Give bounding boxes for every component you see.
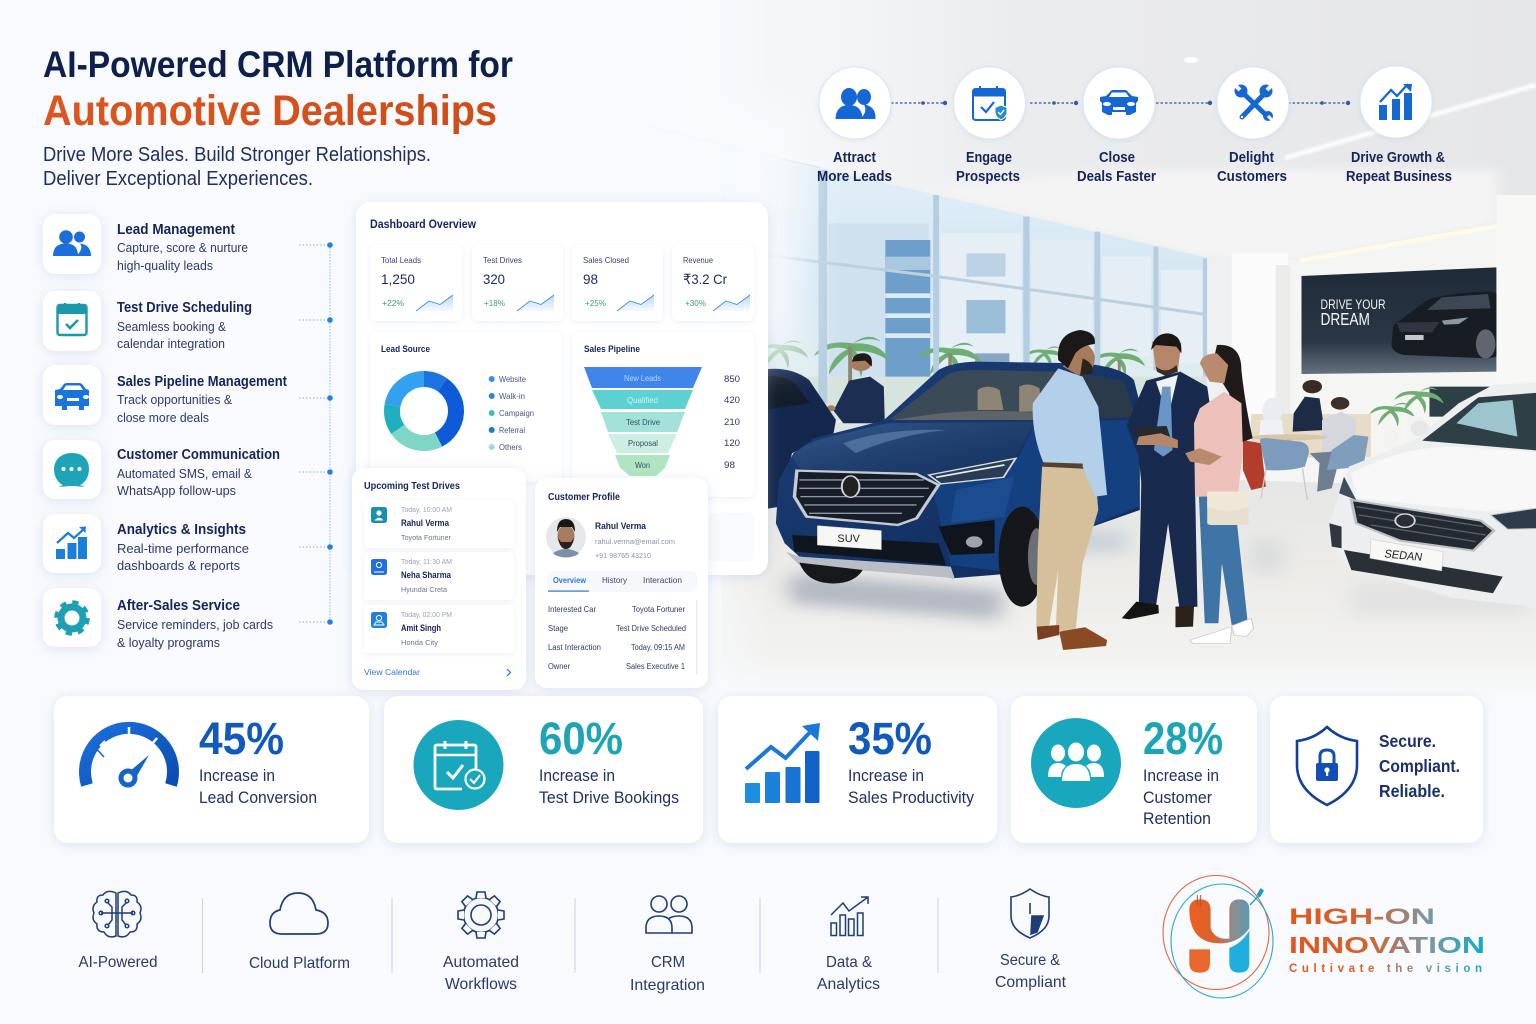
icon: chat bubble xyxy=(54,453,89,487)
feature: after-sales service: After-Sales Service xyxy=(117,598,240,614)
right pillar xyxy=(1496,195,1536,395)
step: engage prospects xyxy=(954,67,1026,185)
donut legend: Referral xyxy=(499,426,525,435)
lit ceiling area xyxy=(917,170,1498,261)
step: drive growth and repeat business: Drive Growth & xyxy=(1351,150,1445,166)
row: Neha Sharma: Neha Sharma xyxy=(401,570,451,580)
avatar portrait xyxy=(546,517,586,558)
stat card: customer retention: Customer xyxy=(1143,789,1212,807)
step: close deals faster: Close xyxy=(1099,150,1135,166)
capability: CRM integration: CRM xyxy=(651,954,685,971)
stat card: sales productivity: Increase in xyxy=(848,767,924,785)
feature: test drive scheduling: Test Drive Scheduling xyxy=(117,300,252,316)
blue SUV xyxy=(776,362,1140,607)
icon: gauge xyxy=(85,727,173,785)
feature: analytics and insights: Real-time performance xyxy=(117,542,249,556)
funnel chart: New Leads xyxy=(624,374,661,383)
icon: outline shield xyxy=(1011,889,1049,938)
panel: customer profile: +91 98765 43210 xyxy=(595,551,651,560)
stat card: secure compliant reliable: Compliant. xyxy=(1379,756,1460,776)
icon: outline people xyxy=(646,896,692,933)
tabs: History xyxy=(602,575,628,585)
icon: team circle xyxy=(1031,718,1121,808)
donut legend: Website xyxy=(499,375,527,384)
profile details: Today, 09:15 AM xyxy=(631,643,685,652)
capability: cloud platform: Cloud Platform xyxy=(249,955,350,972)
wall poster: DREAM xyxy=(1321,309,1370,329)
poster car xyxy=(1391,292,1496,358)
step: delight customers xyxy=(1217,67,1289,185)
feature: customer communication: Customer Communication xyxy=(117,447,280,463)
profile details: Last Interaction xyxy=(548,643,601,652)
icon: gear xyxy=(56,602,88,634)
stat card: secure compliant reliable: Secure. xyxy=(1379,731,1436,751)
KPI: revenue: +30% xyxy=(685,298,706,308)
stat card: sales productivity: 35% xyxy=(848,713,932,764)
stat card: test drive bookings: Increase in xyxy=(539,767,615,785)
icon: brain xyxy=(93,891,141,937)
KPI: total leads: Total Leads xyxy=(381,255,421,265)
funnel values: 420 xyxy=(724,395,740,406)
capability: automated workflows xyxy=(443,892,519,993)
icon: bar chart xyxy=(56,526,87,559)
floor reflections xyxy=(790,530,1527,620)
feature: sales pipeline management xyxy=(43,365,287,425)
wall poster: DRIVE YOUR xyxy=(1321,296,1386,312)
KPI: sales closed: +25% xyxy=(585,298,606,308)
sedan plate: SEDAN xyxy=(1383,548,1424,564)
logo: High-On Innovation: INNOVATION xyxy=(1289,932,1485,958)
step: close deals faster xyxy=(1077,67,1156,185)
stat card: customer retention: Retention xyxy=(1143,810,1211,828)
row: Amit Singh xyxy=(364,605,514,653)
stat card: customer retention: 28% xyxy=(1143,713,1223,764)
KPI: test drives xyxy=(472,245,563,321)
showroom interior and vehicles xyxy=(721,145,1536,700)
icon: calendar circle xyxy=(414,720,504,810)
capability: secure and compliant: Secure & xyxy=(1000,952,1060,969)
funnel values: 850 xyxy=(724,374,740,385)
icon: chevron xyxy=(507,669,510,676)
row: Neha Sharma xyxy=(364,552,514,600)
faint lower card xyxy=(709,513,754,561)
profile details xyxy=(548,605,686,671)
capability: secure and compliant: Compliant xyxy=(995,974,1067,991)
feature: lead management: Capture, score & nurture xyxy=(117,241,248,255)
sedan plate xyxy=(1370,539,1443,571)
funnel values: 120 xyxy=(724,438,740,449)
funnel chart xyxy=(584,367,702,476)
stat card: secure compliant reliable: Reliable. xyxy=(1379,781,1445,801)
feature: customer communication xyxy=(43,440,280,499)
stat card: customer retention: Increase in xyxy=(1143,767,1219,785)
stat card: test drive bookings xyxy=(384,696,703,843)
capability: CRM integration xyxy=(630,896,705,994)
KPI: revenue xyxy=(672,245,754,321)
title: AI-Powered CRM Platform for xyxy=(43,43,513,85)
feature: after-sales service: & loyalty programs xyxy=(117,636,220,650)
icon: cloud xyxy=(270,893,328,934)
upper left haze of photo xyxy=(700,110,800,350)
icon: growth chart xyxy=(1379,84,1412,120)
stat card: test drive bookings: 60% xyxy=(539,713,623,764)
icon: crossed wrenches xyxy=(1234,84,1273,121)
KPI: sales closed xyxy=(572,245,663,321)
capability: automated workflows: Automated xyxy=(443,954,519,971)
icon: outline gear xyxy=(458,892,504,938)
lead source chart card: Lead Source xyxy=(381,344,430,355)
subtitle: Drive More Sales. Build Stronger Relationships. xyxy=(43,143,431,166)
stat card: lead conversion xyxy=(54,696,369,843)
KPI: total leads: +22% xyxy=(382,298,404,308)
profile details: Toyota Fortuner xyxy=(632,605,685,614)
profile details: Interested Car xyxy=(548,605,596,614)
feature: lead management: high-quality leads xyxy=(117,259,213,273)
KPI: test drives: +18% xyxy=(484,298,505,308)
row: Amit Singh: Today, 02:00 PM xyxy=(401,610,452,619)
stat card: customer retention xyxy=(1011,696,1257,843)
left edge fade of photo xyxy=(600,0,770,700)
capability: data and analytics: Analytics xyxy=(817,976,880,993)
feature: analytics and insights: Analytics & Insights xyxy=(117,522,246,538)
profile details: Owner xyxy=(548,662,570,671)
capability: AI-powered: AI-Powered xyxy=(78,954,158,971)
feature: analytics and insights: dashboards & reports xyxy=(117,559,240,573)
sales pipeline card: Sales Pipeline xyxy=(584,344,640,355)
stat card: lead conversion: 45% xyxy=(199,713,284,764)
feature: customer communication: WhatsApp follow-ups xyxy=(117,484,236,498)
tabs: Interaction xyxy=(643,575,682,585)
icon: people xyxy=(836,88,876,119)
step: drive growth and repeat business xyxy=(1346,66,1452,185)
panel: upcoming test drives: View Calendar xyxy=(364,667,420,677)
tabs xyxy=(547,571,697,592)
step: attract more leads xyxy=(817,67,892,185)
panel: dashboard overview xyxy=(356,202,768,575)
KPI: total leads: 1,250 xyxy=(381,271,415,287)
KPI: sales closed: Sales Closed xyxy=(583,255,629,265)
row: Rahul Verma: Today, 10:00 AM xyxy=(401,505,452,514)
row: Amit Singh: Honda City xyxy=(401,638,438,647)
subtitle: Deliver Exceptional Experiences. xyxy=(43,167,313,190)
step: delight customers: Delight xyxy=(1229,150,1274,166)
capability: automated workflows: Workflows xyxy=(445,976,517,993)
logo: High-On Innovation: Cultivate the vision xyxy=(1289,963,1482,975)
back wall xyxy=(1207,226,1498,507)
KPI: revenue: ₹3.2 Cr xyxy=(683,271,727,287)
SUV plate xyxy=(817,526,881,550)
donut chart xyxy=(392,379,456,443)
feature: sales pipeline management: close more deals xyxy=(117,411,209,425)
bottom row dividers xyxy=(202,898,938,973)
donut legend: Walk-in xyxy=(499,392,525,401)
subtitle xyxy=(43,143,431,190)
feature: after-sales service: Service reminders, job cards xyxy=(117,618,273,632)
title xyxy=(43,43,513,135)
capability: AI-powered xyxy=(78,891,158,971)
icon: shield with lock xyxy=(1297,727,1357,805)
step: drive growth and repeat business: Repeat Business xyxy=(1346,169,1452,185)
customer in pink top xyxy=(1185,345,1254,643)
funnel values xyxy=(724,374,740,471)
lounge with customers xyxy=(1243,380,1496,500)
profile details: Test Drive Scheduled xyxy=(616,624,686,633)
step: close deals faster: Deals Faster xyxy=(1077,169,1156,185)
step: attract more leads: Attract xyxy=(833,150,876,166)
icon: growth bars xyxy=(745,723,820,803)
step: engage prospects: Engage xyxy=(966,150,1012,166)
bottom fade of photo xyxy=(600,655,1536,700)
logo mark xyxy=(1163,876,1273,998)
funnel values: 210 xyxy=(724,417,740,428)
funnel values: 98 xyxy=(724,460,735,471)
panel: upcoming test drives xyxy=(352,468,526,690)
panel: customer profile: Rahul Verma xyxy=(595,521,647,531)
background salesperson xyxy=(827,353,885,423)
KPI: total leads xyxy=(370,245,462,321)
panel: dashboard overview: Dashboard Overview xyxy=(370,219,476,231)
showroom floor xyxy=(721,420,1536,700)
wall poster xyxy=(1301,267,1496,374)
feature: analytics and insights xyxy=(43,514,249,573)
funnel chart: Won xyxy=(635,461,650,470)
KPI: revenue: Revenue xyxy=(683,255,713,265)
stat card: lead conversion: Lead Conversion xyxy=(199,789,317,807)
capability: cloud platform xyxy=(249,893,350,972)
customer in blue shirt xyxy=(1033,330,1107,650)
white sedan xyxy=(1329,382,1536,608)
feature: lead management xyxy=(43,214,248,274)
icon: people xyxy=(53,230,91,256)
feature: test drive scheduling xyxy=(43,291,252,351)
KPI: sales closed: 98 xyxy=(583,271,598,287)
feature: test drive scheduling: Seamless booking & xyxy=(117,320,227,334)
sedan grille xyxy=(1351,500,1494,551)
row: Neha Sharma: Hyundai Creta xyxy=(401,585,448,594)
step: attract more leads: More Leads xyxy=(817,169,892,185)
feature: customer communication: Automated SMS, email & xyxy=(117,467,253,481)
stat card: sales productivity: Sales Productivity xyxy=(848,789,975,807)
row: Neha Sharma: Today, 11:30 AM xyxy=(401,557,452,566)
ceiling xyxy=(600,0,1536,320)
KPI: test drives: 320 xyxy=(483,271,505,287)
profile details: Sales Executive 1 xyxy=(626,662,685,671)
feature: sales pipeline management: Track opportunities & xyxy=(117,393,233,407)
icon: outline chart xyxy=(831,897,868,936)
capability: secure and compliant xyxy=(995,889,1067,991)
row: Amit Singh: Amit Singh xyxy=(401,623,441,633)
step: engage prospects: Prospects xyxy=(956,169,1020,185)
capability: data and analytics: Data & xyxy=(826,954,872,971)
SUV grille xyxy=(794,471,939,525)
sales pipeline card xyxy=(572,332,754,497)
glass wall with city view xyxy=(721,145,1210,430)
donut legend xyxy=(489,375,534,452)
stat card: lead conversion: Increase in xyxy=(199,767,275,785)
panel: upcoming test drives: Upcoming Test Drives xyxy=(364,481,460,492)
funnel chart: Qualified xyxy=(627,396,658,405)
row: Rahul Verma xyxy=(364,500,514,548)
showroom photo scene xyxy=(600,0,1536,700)
capability: CRM integration: Integration xyxy=(630,977,705,994)
feature: after-sales service xyxy=(43,588,273,650)
lead source chart card xyxy=(370,332,562,482)
donut legend: Campaign xyxy=(499,409,534,418)
feature: lead management: Lead Management xyxy=(117,222,235,238)
row: Rahul Verma: Rahul Verma xyxy=(401,518,449,528)
stat card: secure compliant reliable xyxy=(1270,696,1483,843)
capability: data and analytics xyxy=(817,897,880,993)
feature: sales pipeline management: Sales Pipeline Management xyxy=(117,374,287,390)
tabs: Overview xyxy=(553,575,586,585)
funnel chart: Test Drive xyxy=(626,418,661,427)
KPI: test drives: Test Drives xyxy=(483,255,522,265)
panel: customer profile xyxy=(535,478,708,688)
SUV plate: SUV xyxy=(837,532,860,545)
stat card: sales productivity xyxy=(718,696,997,843)
donut legend: Others xyxy=(499,443,522,452)
icon: calendar with check xyxy=(973,86,1007,120)
sales consultant in navy suit xyxy=(1122,333,1210,627)
row: Rahul Verma: Toyota Fortuner xyxy=(401,533,451,542)
icon: car xyxy=(55,383,89,410)
panel: customer profile: Customer Profile xyxy=(548,492,620,503)
feature: test drive scheduling: calendar integration xyxy=(117,337,225,351)
icon: car xyxy=(1100,90,1138,115)
journey steps connectors xyxy=(891,101,1350,105)
stat card: test drive bookings: Test Drive Bookings xyxy=(539,789,679,807)
title: Automotive Dealerships xyxy=(43,87,497,135)
feature list connector xyxy=(299,242,333,625)
icon: calendar xyxy=(57,303,87,335)
panel: customer profile: rahul.verma@email.com xyxy=(595,537,675,546)
logo: High-On Innovation xyxy=(1163,876,1485,998)
step: delight customers: Customers xyxy=(1217,169,1287,185)
funnel chart: Proposal xyxy=(628,439,658,448)
left parked car xyxy=(760,369,836,510)
profile details: Stage xyxy=(548,624,568,633)
logo: High-On Innovation: HIGH-ON xyxy=(1289,904,1435,929)
